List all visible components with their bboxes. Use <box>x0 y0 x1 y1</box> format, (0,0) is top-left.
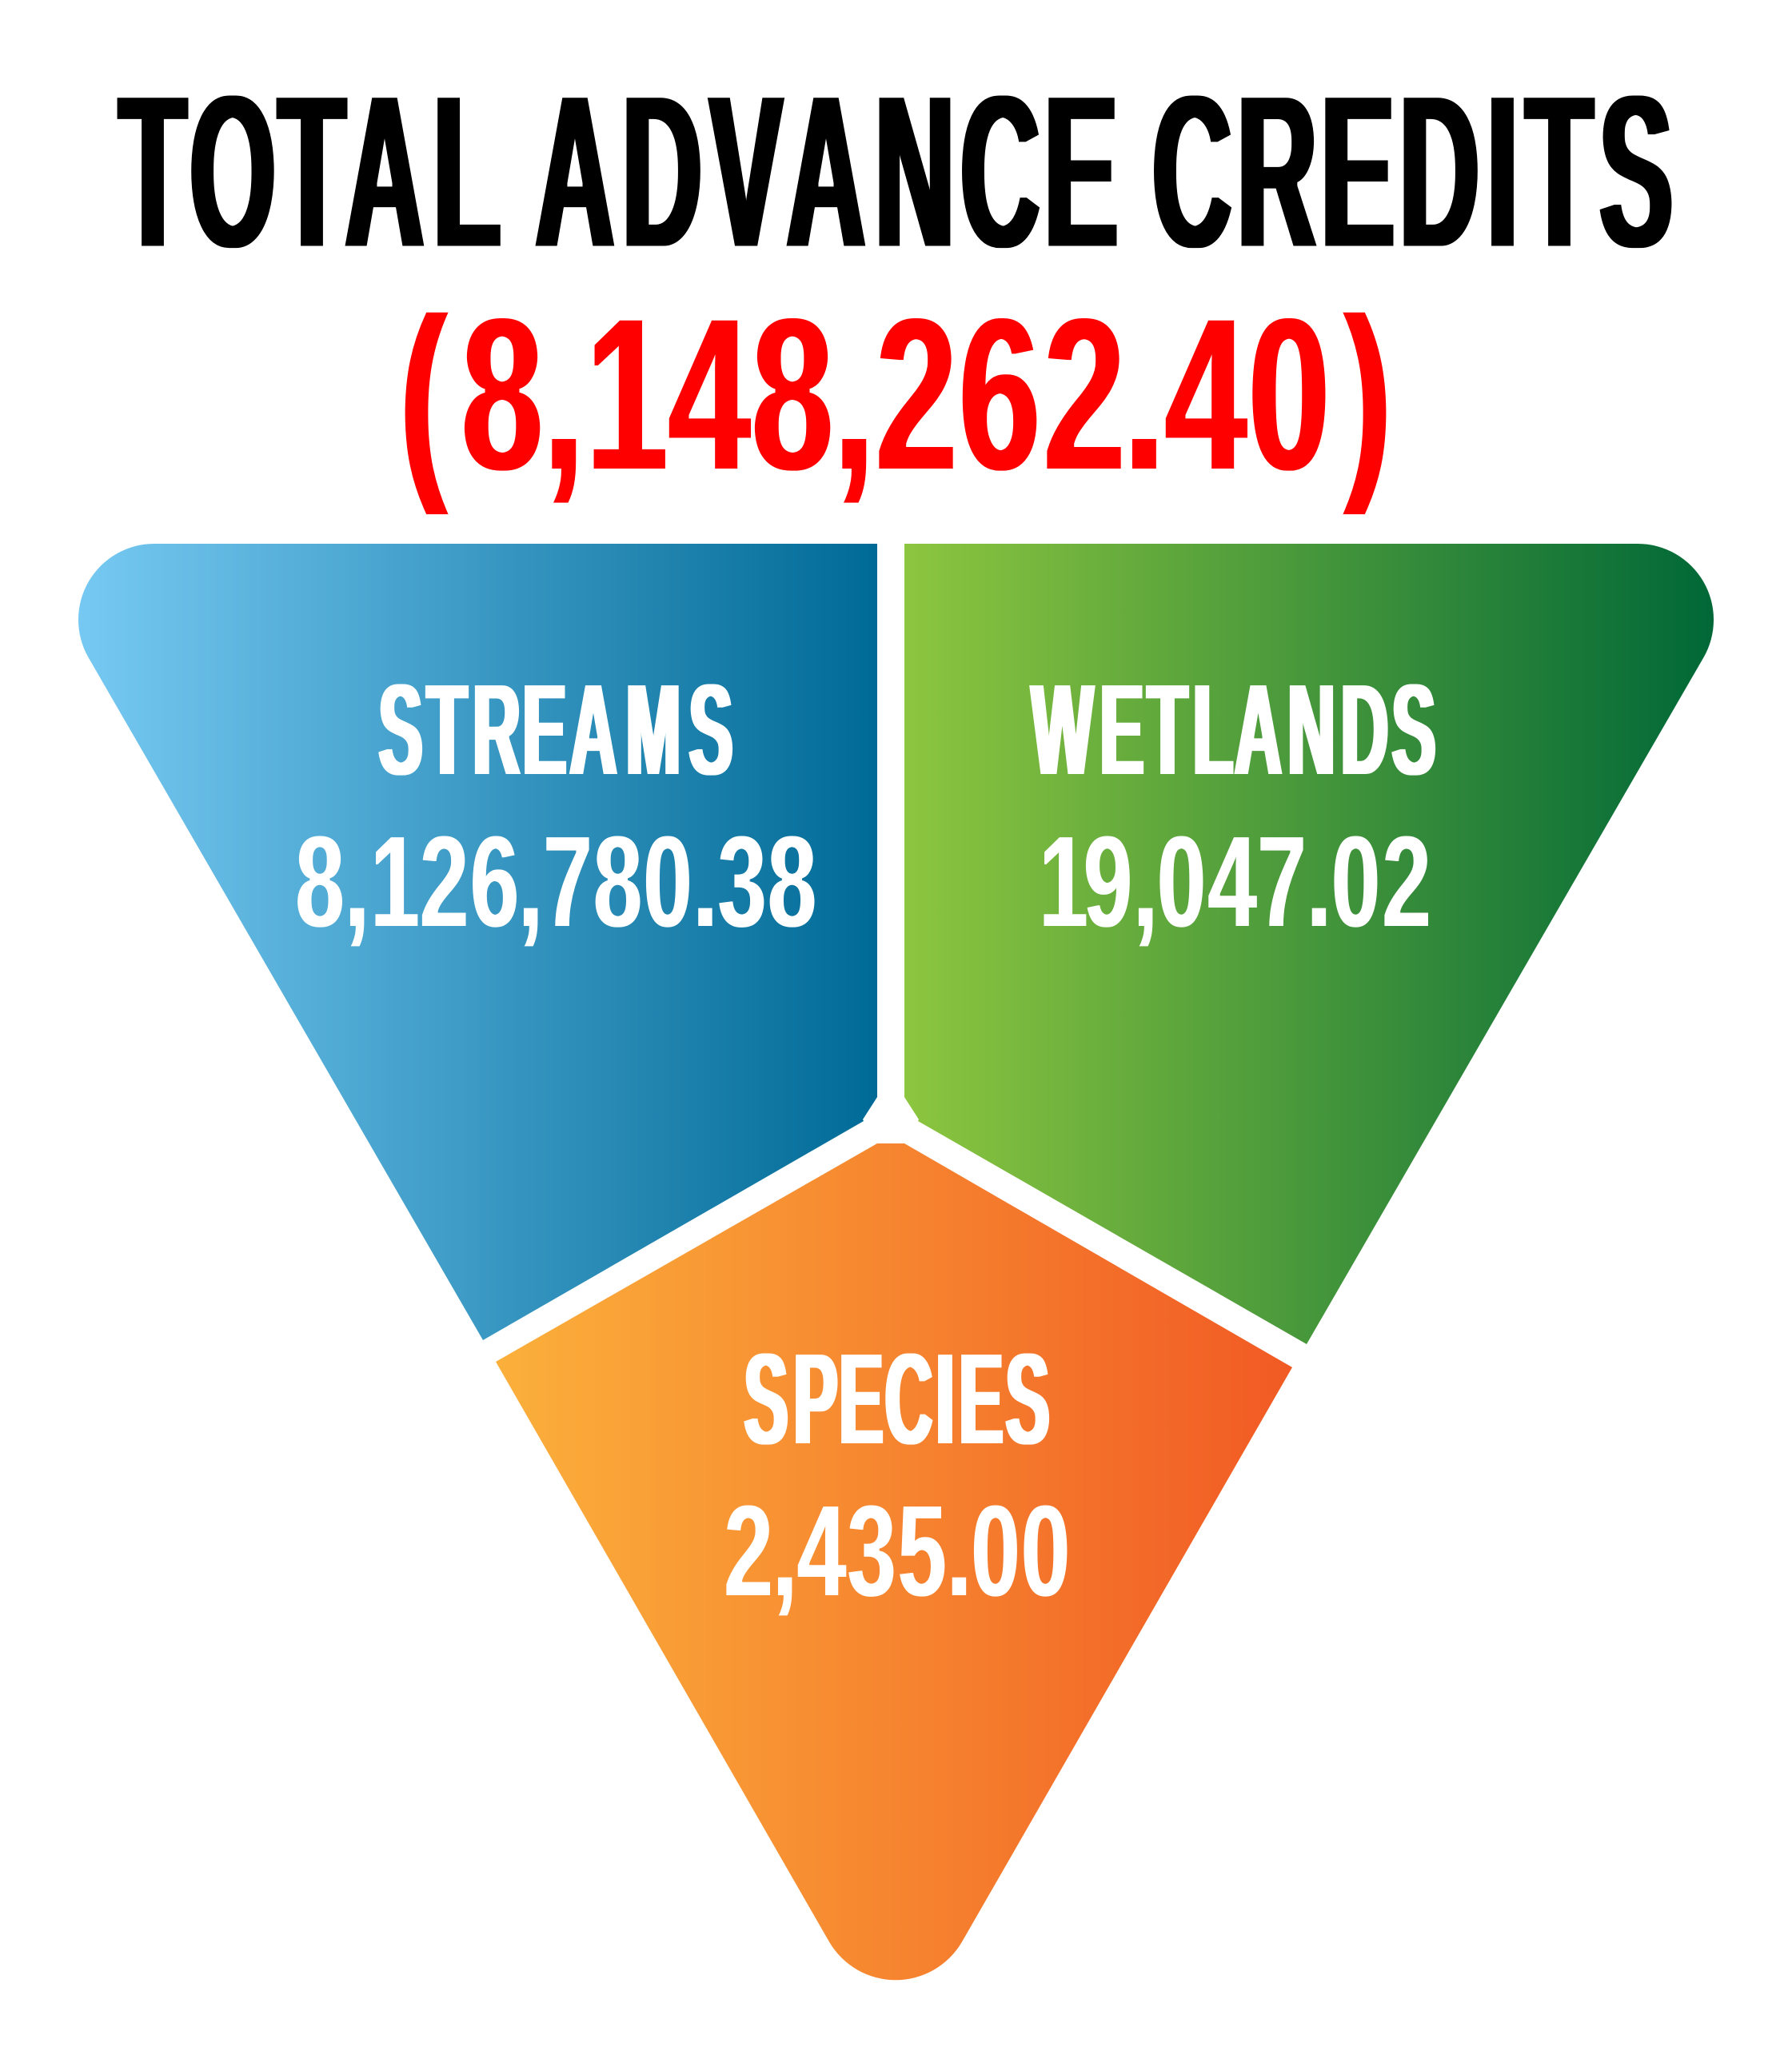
panel: wetlands <box>904 544 1714 1344</box>
panel: species <box>496 1143 1292 1980</box>
streams value: 8,126,780.38 <box>296 808 816 955</box>
title total figure: (8,148,262.40) <box>399 271 1392 517</box>
species label: SPECIES <box>744 1327 1049 1472</box>
wetlands label: WETLANDS <box>1032 657 1435 803</box>
wetlands value: 19,047.02 <box>1040 808 1431 955</box>
species shape <box>496 1143 1292 1980</box>
title line: total advance credits: TOTAL ADVANCE CREDITS <box>119 50 1673 295</box>
streams shape <box>78 544 877 1340</box>
streams label: STREAMS <box>379 657 732 803</box>
wetlands shape <box>904 544 1714 1344</box>
panel: streams <box>78 544 877 1340</box>
title <box>119 50 1673 517</box>
species value: 2,435.00 <box>724 1478 1070 1624</box>
